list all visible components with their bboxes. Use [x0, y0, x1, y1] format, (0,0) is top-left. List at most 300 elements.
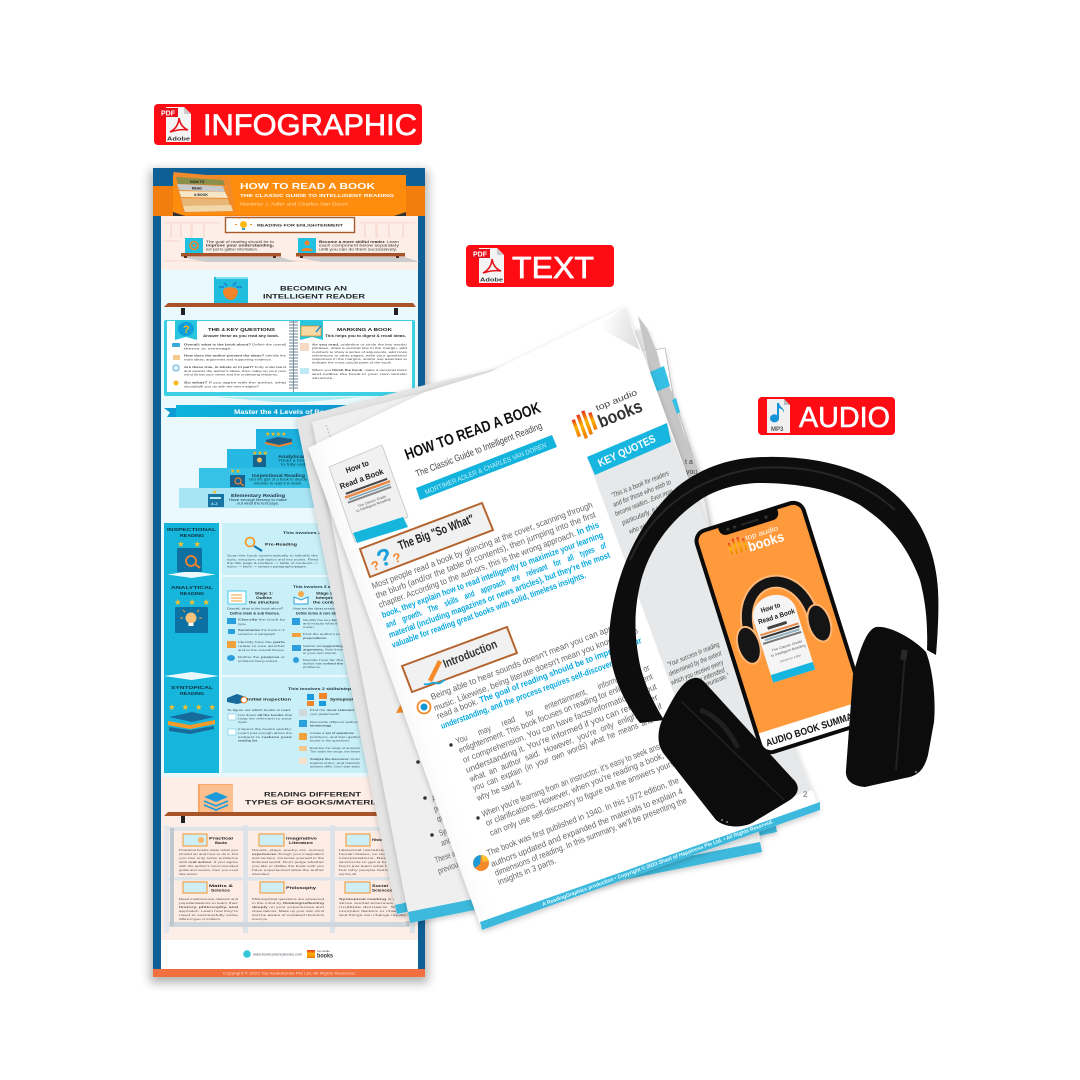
text block: introduction body: You may read for entertainment, information, or: [454, 662, 651, 746]
phone caption bar: AUDIO BOOK SUMMARY: [765, 708, 866, 749]
panel: key questions and marking card: and assess the author's ideas, then make up your own: [184, 369, 286, 373]
row: analytical reading: Outline: [256, 596, 272, 600]
staircase: 4 reading levels: ★: [212, 489, 217, 496]
text block: intro paragraph: Most people read a book by glancing at the cover, scanning through: [370, 500, 594, 591]
card: maths and science: Maths &: [209, 883, 233, 888]
text block: intro paragraph: chapter. According to the authors, this is the wrong approach. In this: [377, 520, 600, 610]
card: practical books: should do and how to do it, but: [179, 852, 238, 856]
footer: website and logo: [161, 940, 418, 969]
icon: magnifier book: [177, 548, 202, 572]
document title: MORTIMER ADLER & CHARLES VAN DOREN: [424, 442, 548, 496]
staircase: 4 reading levels: Get the gist of a book to decide: [249, 478, 307, 482]
row: analytical reading: Classify the book by: [238, 618, 286, 622]
card: imaginative literature: and senses. Immerse yourself in the: [252, 856, 324, 860]
sidebar: key quotes: writer intended: [688, 667, 727, 688]
row: syntopical reading: ★★★★: [168, 702, 216, 712]
row: analytical reading: Define the purpose or: [238, 655, 285, 659]
card: imaginative literature: Literature: [289, 840, 314, 845]
label: text format: TEXT: [512, 250, 594, 285]
heading: becoming an intelligent reader: [164, 277, 416, 315]
icon: target: [418, 700, 430, 714]
row: syntopical reading: Learn just enough about the: [238, 731, 292, 735]
page fold: [597, 307, 640, 350]
phone book cover: The Classic Guide: [771, 639, 803, 653]
text block: introduction body: can only use self-discovery to figure out the answers yourself: [488, 755, 684, 838]
row: analytical reading: [164, 574, 415, 676]
card: maths and science: used to successfully solve: [179, 913, 239, 917]
icon: interpret: [294, 591, 308, 604]
phone book cover: How to: [760, 602, 781, 615]
row: analytical reading: type.: [238, 622, 247, 626]
icon: pencil: [424, 660, 445, 684]
sidebar: key quotes: and for those who wish to: [612, 479, 672, 509]
box: the big so what: The Big "So What": [396, 512, 476, 553]
back page sidebar edge: [638, 316, 700, 490]
ribbon: master the 4 levels: [164, 405, 412, 417]
right ear cup: [846, 627, 935, 787]
card: practical books: [176, 832, 241, 876]
row: analytical reading: How are the ideas presented?: [293, 606, 343, 610]
icon: books and magnifier: [227, 694, 247, 704]
card: practical books: you can only solve problems: [179, 856, 239, 860]
card: history: way they did.: [339, 872, 357, 876]
row: analytical reading: This involves 3 skills/steps: [293, 585, 353, 589]
phone logo: books: [746, 528, 786, 555]
footer: website and logo: books: [317, 954, 334, 960]
row: analytical reading: Overall, what is the book about?: [227, 606, 283, 610]
book thumbnail: The Classic Guide: [357, 494, 387, 508]
icon: mp3 file: MP3: [771, 427, 784, 433]
icon: pdf file: PDF: [473, 252, 488, 258]
book thumbnail: to Intelligent Reading: [356, 497, 391, 513]
text block: introduction body: understanding, and the process requires self-discovery: [439, 657, 617, 731]
row: analytical reading: Identify how the parts: [238, 640, 285, 644]
card: imaginative literature: intended.: [252, 872, 270, 876]
card: social sciences: multiple domains. Study: [339, 905, 408, 909]
back page text: Syntopical reading, and: [437, 808, 497, 838]
panel: key questions and marking card: So what? If you agree with the author, what: [184, 380, 286, 384]
text block: introduction body: authors updated and expanded the materials to explain 4: [489, 786, 684, 869]
panel: infographic poster: [153, 168, 425, 977]
heading: becoming an intelligent reader: INTELLIGENT READER: [263, 294, 365, 300]
text block: introduction body: Being able to hear sounds doesn't mean you can appreciate: [429, 614, 637, 702]
row: syntopical reading: [164, 676, 415, 773]
panel: key questions and marking card: [164, 320, 415, 396]
card: imaginative literature: you like or dislike the book until you: [252, 864, 324, 868]
back page text: previous editions of it: [436, 846, 497, 876]
staircase: 4 reading levels: out what the text says.: [237, 502, 279, 506]
card: history: but why people behaved the: [339, 868, 408, 872]
text block: introduction body: understanding it. You're informed if you can remember: [464, 692, 659, 775]
footer: website and logo: www.bookcurrencybooks.com: [253, 952, 302, 956]
header banner: THE CLASSIC GUIDE TO INTELLIGENT READING: [240, 193, 395, 198]
card: history: interpretations. Read history: [339, 856, 408, 860]
card: history: History: [372, 837, 387, 842]
icon: book stack: A BOOK: [194, 193, 208, 197]
sidebar: key quotes: particularly, it is for: [620, 501, 671, 527]
panel: key questions and marking card: When you finish the book , make a personal index: [312, 368, 408, 372]
shelf cards: [176, 832, 410, 921]
sidebar: key quotes: KEY QUOTES: [596, 433, 658, 470]
row: analytical reading: problems being solved.: [238, 659, 278, 663]
text block: introduction body: or clarifications. However, when you're reading a book, you: [484, 745, 679, 828]
row: syntopical reading: The wider the range, the better: [310, 750, 360, 754]
phone logo: [726, 523, 786, 560]
box: introduction: [402, 627, 517, 692]
ribbon: master the 4 levels: Master the 4 Levels of Reading: [234, 410, 344, 416]
card: history: [336, 832, 410, 876]
staircase: 4 reading levels: ★★: [230, 468, 241, 475]
phone book cover: [748, 589, 815, 683]
staircase: 4 reading levels: Elementary Reading: [231, 493, 285, 498]
card: imaginative literature: experiences through your imagination: [252, 852, 324, 856]
row: syntopical reading: SYNTOPICAL: [171, 685, 213, 691]
row: inspectional reading: index -> blurb -> random paragraphs/pages.: [227, 564, 307, 568]
row: inspectional reading: ★★: [177, 539, 201, 549]
back page text: A summary of the key: [430, 774, 491, 804]
panel: key questions and marking card: references to other pages, write your questions/: [312, 354, 407, 358]
row: inspectional reading: READING: [180, 533, 204, 539]
left shelf item: not just to gather information.: [206, 248, 258, 252]
header banner: HOW TO READ A BOOK: [240, 181, 376, 191]
document title: The Classic Guide to Intelligent Reading: [414, 421, 544, 480]
text block: introduction body: dimensions of reading. In this summary, we'll be presenting the: [493, 795, 688, 878]
document: back page two: Shaol of Happiness Pte Ltd. • All Rights Reserved.: [619, 837, 758, 870]
row: inspectional reading: This involves 2 skills/steps: [283, 531, 351, 535]
text block: introduction body: you can explain (in your own words) what he means and: [471, 715, 654, 793]
left shelf item: The goal of reading should be to: [206, 240, 274, 244]
row: analytical reading: Interpret: [316, 596, 336, 600]
right shelf item: Become a more skilful reader. Learn: [319, 240, 399, 244]
row: analytical reading: sentence or paragraph.: [238, 632, 276, 636]
panel: reading different types of books: READING DIFFERENT: [264, 792, 361, 798]
card: social sciences: since social sciences span: [339, 901, 408, 905]
icon: bulb book: [175, 607, 208, 633]
icon: question marks: ?: [391, 549, 403, 566]
row: analytical reading: ★★★: [174, 597, 210, 607]
card: history: human biases, so read multiple: [339, 852, 408, 856]
row: syntopical reading: Initial Inspection: [247, 696, 292, 702]
row: syntopical reading: answers differ. Don't take sides: [310, 764, 361, 768]
card: philosophy: observations. Make up your own mind: [252, 909, 324, 913]
text block: introduction body: or comprehension. You can have facts/information without: [461, 681, 658, 765]
card: maths and science: popularisations to learn their: [179, 901, 238, 905]
icon: pdf file: Adobe: [167, 136, 190, 142]
staircase: 4 reading levels: whether to read it in detail.: [254, 482, 302, 486]
staircase: 4 reading levels: Inspectional Reading: [252, 473, 305, 478]
box: the big so what: [360, 503, 493, 577]
text block: introduction body: [429, 614, 688, 887]
right shelf item: each component below separately: [319, 244, 400, 248]
panel: key questions and marking card: should/will you do with the new insights?: [184, 384, 259, 388]
card: social sciences: [336, 881, 410, 921]
back page text: questions to consider: [435, 794, 495, 824]
card: practical books: Practical books state what you: [179, 848, 238, 852]
ribbon: question mark: [175, 320, 197, 340]
text block: introduction body: When you're learning from an instructor, it's easy to seek answers: [480, 736, 676, 819]
book thumbnail: [329, 445, 408, 543]
icon: pdf file: [158, 107, 191, 142]
phone book cover: to Intelligent Reading: [770, 643, 806, 658]
phone logo: top audio: [745, 525, 779, 542]
footer: website and logo: top audio: [317, 949, 330, 953]
headband: [609, 457, 938, 723]
icon: small headphones: [721, 568, 837, 668]
icon: pdf file: PDF: [161, 110, 176, 118]
panel: key questions and marking card: structure.: [312, 376, 334, 380]
panel: reading for enlightenment: READING FOR ENLIGHTENMENT: [257, 222, 344, 228]
bottom strip: A ReadingGraphics production • Copyright © 2023 Shaol of Happiness Pte Ltd. • All Rights Reserved.: [541, 818, 775, 908]
card: history: accounts to get a fuller view.: [339, 860, 407, 864]
label: infographic format: [154, 104, 422, 145]
heading: becoming an intelligent reader: BECOMING AN: [280, 286, 347, 292]
copyright bar: [153, 969, 425, 977]
icon: bulb book: [253, 455, 266, 467]
text block: intro paragraph: material (including magazines or news articles), but they're the most: [387, 550, 611, 640]
phone book cover: Read a Book: [757, 608, 796, 626]
sidebar: key quotes: "Your success in reading: [666, 641, 721, 669]
card: maths and science: history, philosophy, and: [179, 905, 238, 909]
row: analytical reading: arguments. Note them: [303, 648, 344, 652]
row: analytical reading: Identify the key terms: [303, 618, 343, 622]
staircase: 4 reading levels: Have enough literacy to make: [229, 498, 287, 502]
bottom strip: [480, 802, 820, 930]
row: syntopical reading: Inspect the books quickly:: [238, 727, 292, 731]
staircase: 4 reading levels: to fully understand it: [281, 462, 326, 466]
text block: intro paragraph: and growth. The skills and approach are relevant for all types of: [384, 540, 607, 630]
row: analytical reading: READING: [180, 591, 204, 597]
sidebar: key quotes: which you receive every: [670, 659, 725, 687]
card: philosophy: Philosophy: [286, 885, 317, 890]
icon: network: [307, 693, 327, 706]
card: imaginative literature: have experienced what the author: [252, 868, 324, 872]
card: philosophy: in the mind by thinking/reflecting: [252, 901, 324, 905]
row: analytical reading: the contents: [313, 600, 343, 604]
icon: question marks: ?: [373, 543, 396, 573]
row: syntopical reading: your goals/needs.: [310, 712, 340, 716]
panel: key questions and marking card: How does the author present the ideas? Identify the: [184, 354, 286, 358]
row: analytical reading: Gather all supporting: [303, 644, 343, 648]
book thumbnail: How to: [344, 458, 370, 475]
card: imaginative literature: fictional world. Don't judge whether: [252, 860, 324, 864]
text block: introduction body: The book was first published in 1940. In this 1972 edition, the: [485, 775, 680, 858]
left ear cup: [658, 678, 798, 826]
card: practical books: with the author's recommended: [179, 864, 238, 868]
label: text format: [466, 245, 614, 287]
icon: outline: [228, 591, 246, 604]
panel: key questions and marking card: indicate the most crucial parts of the book.: [312, 361, 392, 365]
card: philosophy: Philosophical questions are answered: [252, 897, 324, 901]
document: main page: [308, 307, 820, 930]
card: practical books: take action.: [179, 872, 198, 876]
card: practical books: Books: [215, 840, 227, 845]
label: audio format: [758, 397, 895, 435]
text block: intro paragraph: valuable for reading great books with solid, timeless insights.: [390, 570, 587, 650]
card: imaginative literature: Imaginative: [286, 836, 318, 840]
row: syntopical reading: may be relevant to your: [238, 716, 292, 720]
headphones: [609, 457, 938, 826]
card: imaginative literature: [249, 832, 329, 876]
back page text: [396, 700, 499, 876]
panel: key questions and marking card: Overall: what is the book about? Define the overall: [184, 342, 286, 346]
icon: book stack: [168, 712, 215, 734]
panel: key questions and marking card: THE 4 KEY QUESTIONS: [208, 327, 275, 332]
panel: key questions and marking card: responses in the margins, and/or use asterisks to: [312, 357, 407, 361]
phone: audio player: [691, 498, 873, 757]
panel: key questions and marking card: numbers to show a series of arguments, add cross: [312, 350, 408, 354]
row: syntopical reading: To figure out which books to read:: [227, 708, 291, 712]
staircase: 4 reading levels: Analytical Reading: [278, 454, 328, 459]
sidebar: key quotes: [587, 423, 812, 822]
row: analytical reading: and exactly what they: [303, 622, 344, 626]
panel: key questions and marking card: main ideas, arguments and supporting evidence.: [184, 358, 272, 362]
shelf frame: [164, 825, 415, 933]
document: back page two: [312, 348, 762, 923]
panel: key questions and marking card: As you read, underline or circle the key words/: [312, 342, 407, 346]
icon: layered book: [198, 784, 233, 812]
row: analytical reading: author has solved the: [303, 662, 343, 666]
text block: introduction body: enlightenment. This book focuses on reading for enlightenment: [457, 671, 654, 755]
page number: 2: [803, 790, 808, 799]
staircase: 4 reading levels: ★★★: [252, 450, 268, 457]
icon: question marks: [366, 540, 404, 576]
row: syntopical reading: books to the questions.: [310, 738, 350, 742]
sidebar: key quotes: who wish to become: [628, 511, 677, 536]
row: analytical reading: relate to one another: [238, 644, 285, 648]
row: analytical reading: ANALYTICAL: [171, 585, 213, 591]
card: imaginative literature: Novels, plays, poetry, etc. convey: [252, 848, 325, 852]
icon: pdf file: Adobe: [480, 278, 503, 284]
card: practical books: goals and means, then you must: [179, 868, 238, 872]
card: social sciences: Sciences: [372, 888, 392, 892]
row: syntopical reading: topic.: [238, 720, 248, 724]
left shelf item: improve your understanding,: [206, 244, 274, 248]
card: philosophy: and be aware of unstated rhetorics: [252, 913, 325, 917]
text block: introduction body: why he said it.: [474, 776, 524, 803]
icon: pdf file: [470, 248, 504, 284]
row: analytical reading: Summarize the book in 1: [238, 628, 285, 632]
row: analytical reading: mean.: [303, 625, 315, 629]
header banner: Mortimer J. Adler and Charles Van Doren: [240, 202, 349, 206]
row: analytical reading: Stage 2:: [316, 592, 334, 596]
right shelf item: [296, 238, 420, 262]
text block: introduction body: music. Likewise, being literate doesn't mean you know how to: [432, 625, 639, 713]
box: introduction: Introduction: [441, 637, 499, 671]
text block: introduction body: read a book. The goal of reading should be to improve your: [435, 635, 643, 721]
back page sidebar edge: you: [686, 469, 697, 476]
row: syntopical reading: List down all the books that: [238, 713, 292, 717]
sidebar: key quotes: "This is a book for readers: [610, 470, 671, 500]
row: analytical reading: in your own words.: [303, 651, 337, 655]
left shelf item: [181, 238, 296, 262]
row: inspectional reading: Scan the book systematically to identify the: [227, 554, 318, 558]
text block: intro paragraph: [370, 500, 611, 650]
card: maths and science: approach. Learn how they're: [179, 909, 239, 913]
staircase: 4 reading levels: [179, 429, 401, 508]
back page text: points and the principal: [432, 784, 492, 814]
row: analytical reading: and to the overall theme.: [238, 648, 285, 652]
text block: intro paragraph: book, they explain how to read intelligently to maximize your learning: [380, 530, 604, 620]
card: social sciences: Syntopical reading is useful: [339, 897, 408, 901]
panel: key questions and marking card: MARKING A BOOK: [337, 327, 393, 332]
panel: reading different types of books: TYPES OF BOOKS/MATERIALS: [245, 800, 393, 806]
row: syntopical reading: subject to reduce your: [238, 735, 293, 739]
staircase: 4 reading levels: ★★★★: [265, 431, 287, 438]
infographic shadow: [150, 170, 428, 983]
label: audio format: AUDIO: [799, 402, 890, 434]
card: practical books: with real action . If you agree: [179, 860, 238, 864]
row: analytical reading: Define main & sub themes.: [230, 612, 280, 616]
card: practical books: Practical: [209, 836, 233, 840]
row: inspectional reading: [164, 523, 415, 575]
icon: light bulb: [235, 218, 252, 230]
row: syntopical reading: Reconcile different authors': [310, 720, 361, 724]
panel: key questions and marking card: mind (know your views and the underlying reasons).: [184, 372, 278, 376]
row: analytical reading: propositions.: [303, 636, 327, 640]
panel: key questions and marking card: and outline the book in your own words/: [312, 372, 407, 376]
icon: books on top step: [265, 437, 292, 447]
row: analytical reading: the structure: [249, 600, 279, 604]
logo: top audio books: [570, 387, 645, 441]
row: syntopical reading: Examine the range of answers: [310, 746, 361, 750]
row: inspectional reading: Pre-Reading: [265, 542, 298, 546]
panel: key questions and marking card: This helps you to digest & recall ideas.: [325, 334, 406, 338]
logo: top audio books: top audio: [594, 387, 639, 413]
icon: book stack: [173, 172, 235, 213]
card: social sciences: and things can change rapidly.: [339, 913, 407, 917]
header banner: [153, 172, 425, 216]
card: philosophy: [249, 881, 329, 921]
row: analytical reading: Define terms & core ideas.: [296, 612, 342, 616]
card: philosophy: around you.: [252, 917, 268, 921]
row: syntopical reading: Create a set of questions: [310, 731, 354, 735]
staircase: 4 reading levels: Read a book in detail: [279, 458, 327, 462]
label: infographic format: INFOGRAPHIC: [203, 109, 417, 142]
card: maths and science: [176, 881, 241, 921]
row: analytical reading: Decide how far the: [303, 658, 343, 662]
icon: question marks: ?: [369, 557, 382, 574]
panel: reading for enlightenment: [161, 216, 420, 270]
back page text: These are the points of: [433, 835, 493, 865]
icon: magnifier book: [230, 475, 245, 487]
icon: magnifier: [246, 538, 262, 551]
panel: key questions and marking card: Answer these as you read any book.: [203, 334, 279, 338]
text block: intro paragraph: the blurb (and/or the table of contents), then jumping into the first: [374, 509, 598, 600]
row: syntopical reading: Analyze the discourse: Order: [310, 757, 360, 761]
row: inspectional reading: topic, structure, sub-topics and key points. Read: [227, 558, 318, 562]
row: analytical reading: Find the author's key: [303, 632, 344, 636]
document: back page one: [296, 328, 777, 915]
row: syntopical reading: Syntopical Reading: [330, 696, 373, 702]
panel: key questions and marking card: phrases, draw a vertical line in the margin, add: [312, 346, 407, 350]
icon: A-Z book: A-Z: [211, 501, 218, 506]
card: social sciences: Social: [372, 883, 388, 888]
right shelf item: until you can do them successively.: [319, 248, 397, 252]
row: syntopical reading: terminology.: [310, 724, 332, 728]
card: history: Don't just learn what happened: [339, 864, 408, 868]
row: analytical reading: problems.: [303, 665, 321, 669]
panel: key questions and marking card: theme or message.: [184, 346, 232, 350]
panel: key questions and marking card: Are these true, in whole or in part? Fully understand: [184, 365, 286, 369]
ribbon: question mark: ?: [183, 324, 190, 336]
logo: top audio books: books: [595, 396, 645, 432]
panel: reading different types of books: [161, 777, 418, 940]
card: maths and science: Read math/science classics and: [179, 897, 238, 901]
card: maths and science: Science: [211, 888, 231, 892]
row: syntopical reading: reading list.: [238, 738, 258, 742]
row: syntopical reading: logical order, and classify: [310, 761, 361, 765]
sidebar: key quotes: become readers...Even more: [614, 488, 674, 518]
